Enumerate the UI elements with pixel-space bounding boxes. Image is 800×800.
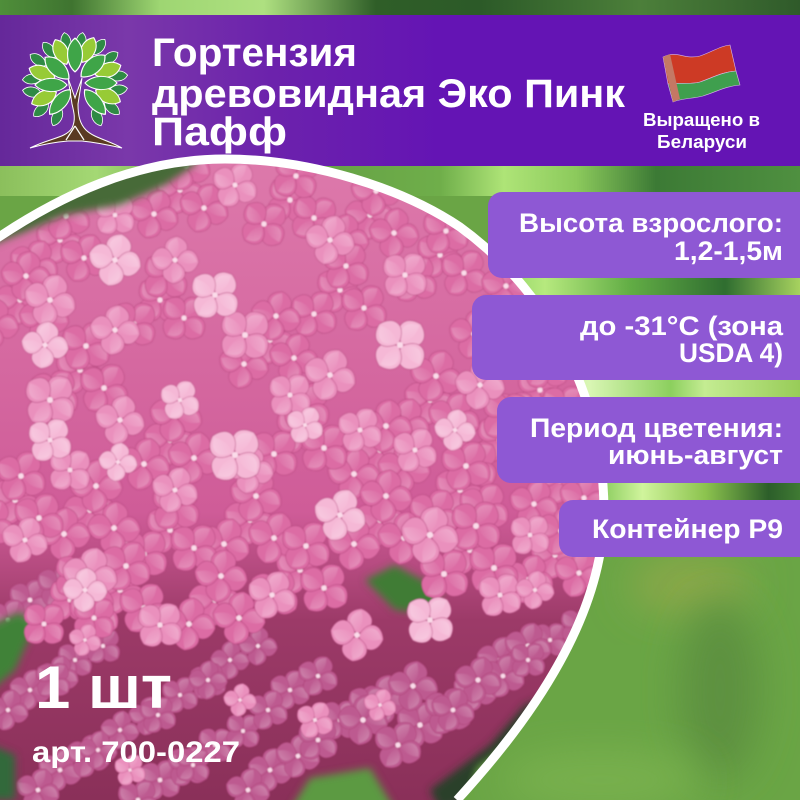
panel: flowering period: июнь-август	[608, 440, 783, 470]
white circle outline	[0, 159, 604, 800]
title: Пафф	[152, 110, 287, 154]
icon: Belarus flag	[663, 45, 740, 102]
panel: container	[559, 500, 800, 557]
flag caption: Выращено в	[643, 110, 760, 130]
title	[152, 31, 626, 154]
panel: hydrangea photo in white circle	[0, 134, 640, 800]
panel: flowering period: Период цветения:	[530, 413, 783, 443]
dark blossoms	[0, 570, 579, 800]
panel: height	[488, 192, 800, 278]
panel: hardiness: USDA 4)	[679, 338, 783, 368]
pale highlight blossoms	[17, 227, 479, 657]
panel: height: Высота взрослого:	[519, 208, 783, 238]
mid blossoms	[0, 134, 616, 658]
panel: height: 1,2-1,5м	[674, 236, 783, 266]
flag caption	[643, 110, 760, 152]
panel: flowering period	[497, 397, 800, 483]
title: Гортензия	[152, 31, 357, 75]
panel: purple header band	[0, 15, 800, 166]
article number: арт. 700-0227	[32, 736, 240, 769]
title: древовидная Эко Пинк	[152, 72, 626, 116]
quantity label: 1 шт	[35, 654, 172, 721]
dark foliage at top left of the photo	[0, 164, 201, 248]
flag caption: Беларуси	[657, 132, 747, 152]
light blossoms	[0, 152, 562, 793]
icon: tree logo	[22, 32, 128, 148]
panel: hardiness: до -31°C (зона	[580, 311, 784, 341]
panel: container: Контейнер P9	[592, 514, 783, 544]
green leaves and gaps behind blossoms	[0, 565, 560, 800]
panel: hardiness	[472, 295, 800, 380]
